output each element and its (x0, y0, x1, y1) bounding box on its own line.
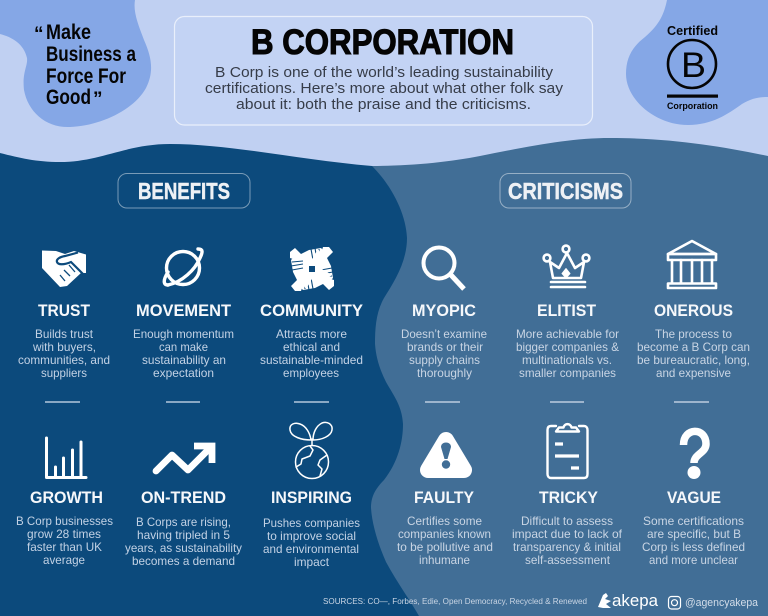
icon: clipboard (548, 424, 588, 478)
card: tricky: Difficult to assess (521, 515, 613, 528)
card: tricky: TRICKY (539, 488, 599, 507)
quote (34, 21, 136, 110)
card: growth: faster than UK (27, 541, 102, 554)
card: movement: expectation (153, 367, 214, 380)
card: elitist: smaller companies (519, 367, 616, 380)
card: vague: and more unclear (649, 554, 738, 567)
card: faulty: to be pollutive and (397, 541, 493, 554)
card: vague: are specific, but B (647, 528, 741, 541)
quote: ” (93, 89, 102, 110)
card: faulty (397, 440, 493, 567)
card: movement: sustainability an (142, 354, 226, 367)
card: onerous (637, 241, 750, 402)
blob: logo background (626, 0, 768, 125)
card: inspiring: Pushes companies (263, 517, 360, 530)
card: onerous: ONEROUS (654, 301, 733, 320)
card: tricky (512, 424, 623, 567)
card: trust: suppliers (41, 367, 87, 380)
card: vague: Some certifications (643, 515, 744, 528)
card: faulty: FAULTY (414, 488, 475, 507)
intro text (205, 65, 564, 113)
card: myopic: thoroughly (417, 367, 472, 380)
card: myopic: supply chains (409, 354, 480, 367)
card: tricky: impact due to lack of (512, 528, 623, 541)
card: myopic (401, 248, 487, 402)
icon: bar chart (46, 438, 86, 478)
card: onerous: become a B Corp can (637, 341, 750, 354)
card: trust: communities, and (18, 354, 110, 367)
instagram handle: @agencyakepa (685, 597, 759, 609)
card: trust: Builds trust (35, 328, 94, 341)
quote: Good (46, 86, 91, 109)
icon: planet (164, 249, 202, 285)
card: growth: average (43, 554, 85, 567)
heading: benefits (118, 174, 250, 208)
heading: criticisms: CRITICISMS (508, 178, 623, 204)
card: faulty: inhumane (419, 554, 470, 567)
card: on-trend: becomes a demand (132, 555, 235, 568)
panel background: criticisms (340, 138, 768, 616)
card: community: employees (283, 367, 339, 380)
card: movement: Enough momentum (133, 328, 234, 341)
logo: akepa: akepa (612, 592, 659, 610)
card: inspiring: impact (294, 556, 330, 569)
card: faulty: Certifies some (407, 515, 482, 528)
card: on-trend: B Corps are rising, (136, 516, 231, 529)
card: onerous: be bureaucratic, long, (637, 354, 750, 367)
card: myopic: MYOPIC (412, 301, 476, 320)
card: inspiring: and environmental (263, 543, 359, 556)
card: trust (18, 250, 110, 402)
card: community: COMMUNITY (260, 301, 364, 320)
card: onerous: and expensive (656, 367, 731, 380)
card: growth: B Corp businesses (16, 515, 113, 528)
card: elitist: More achievable for (516, 328, 619, 341)
icon: akepa bird (598, 593, 611, 608)
intro text: B Corp is one of the world’s leading sustainability (215, 65, 554, 81)
icon: handshake (42, 250, 86, 287)
logo: certified B corporation: Corporation (667, 101, 718, 111)
icon: institution building (668, 241, 716, 288)
icon: trending arrow (156, 446, 212, 471)
card: onerous: The process to (655, 328, 732, 341)
card: movement: can make (159, 341, 208, 354)
card: vague (642, 431, 745, 567)
card: growth: GROWTH (30, 488, 103, 507)
quote: Make (46, 21, 91, 44)
icon: four linked hands (290, 247, 334, 291)
logo: certified B corporation: B (681, 46, 706, 85)
title: B CORPORATION (251, 22, 514, 62)
card: faulty: companies known (398, 528, 491, 541)
card: elitist: multinationals vs. (522, 354, 612, 367)
heading: benefits: BENEFITS (138, 178, 230, 204)
card: myopic: brands or their (407, 341, 483, 354)
logo: certified B corporation (667, 24, 718, 111)
blob: quote background (0, 0, 151, 127)
icon: question mark (684, 431, 706, 479)
card: elitist (516, 246, 619, 402)
sources: SOURCES: CO—, Forbes, Edie, Open Democracy, Recycled & Renewed (323, 596, 587, 606)
card: growth: grow 28 times (27, 528, 101, 541)
card: elitist: ELITIST (537, 301, 597, 320)
card: trust: TRUST (38, 301, 91, 320)
quote: Force For (46, 65, 126, 88)
card: vague: Corp is less defined (642, 541, 745, 554)
icon: crown (544, 246, 589, 287)
quote: Business a (46, 43, 136, 66)
card: trust: with buyers, (32, 341, 96, 354)
title panel (174, 16, 592, 125)
card: community: sustainable-minded (260, 354, 363, 367)
card: tricky: transparency & initial (513, 541, 621, 554)
card: tricky: self-assessment (525, 554, 611, 567)
card: on-trend: years, as sustainability (125, 542, 242, 555)
card: community: Attracts more (276, 328, 347, 341)
heading: criticisms (500, 174, 631, 208)
card: growth (16, 438, 113, 567)
card: community: ethical and (283, 341, 340, 354)
card: community (260, 247, 364, 402)
card: vague: VAGUE (667, 488, 721, 507)
icon: globe with sprout (290, 422, 332, 478)
card: on-trend: ON-TREND (141, 488, 226, 507)
icon: magnifying glass (424, 248, 464, 289)
card: inspiring: INSPIRING (271, 488, 352, 507)
quote: “ (34, 24, 44, 45)
card: on-trend (125, 446, 242, 568)
intro text: about it: both the praise and the criticisms. (236, 97, 531, 113)
intro text: certifications. Here’s more about what other folk say (205, 81, 564, 97)
card: on-trend: having tripled in 5 (137, 529, 230, 542)
card: movement: MOVEMENT (136, 301, 232, 320)
icon: instagram (668, 596, 680, 609)
card: inspiring: to improve social (267, 530, 356, 543)
card: myopic: Doesn’t examine (401, 328, 487, 341)
logo: certified B corporation: Certified (667, 24, 718, 38)
panel background: benefits (0, 144, 419, 616)
card: elitist: bigger companies & (516, 341, 619, 354)
icon: warning triangle (428, 440, 464, 470)
card: inspiring (263, 422, 360, 569)
card: movement (133, 249, 234, 402)
